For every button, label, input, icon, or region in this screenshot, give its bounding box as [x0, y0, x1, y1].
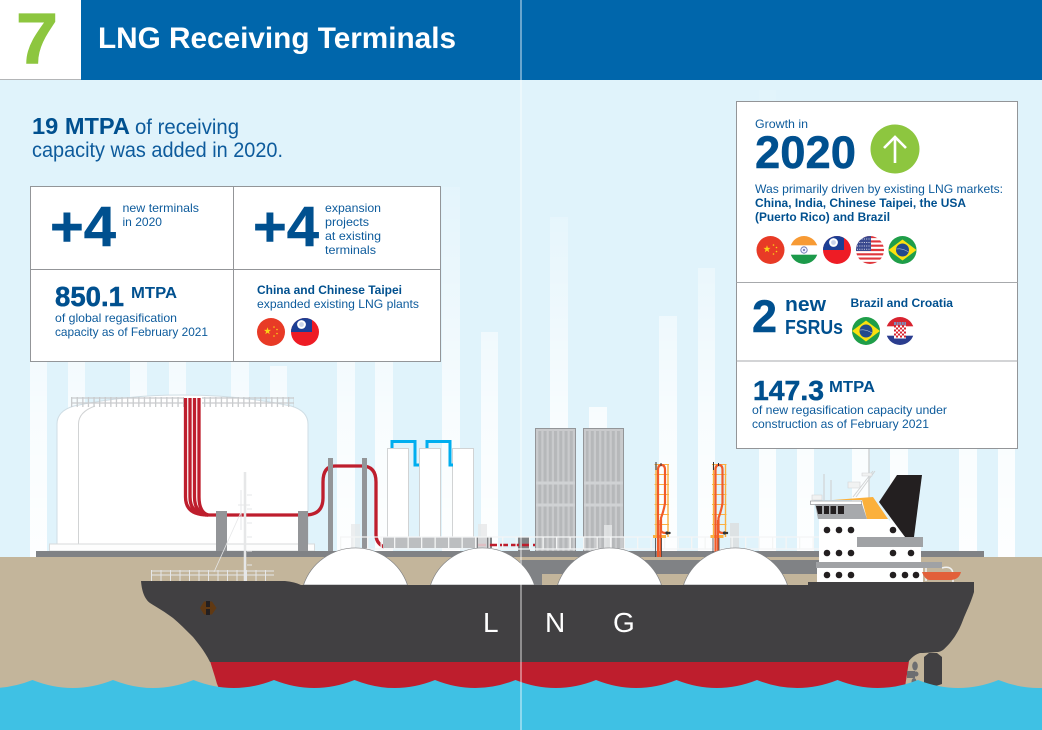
anchor [200, 601, 216, 615]
stat: capacity under construction: 147.3 [753, 375, 824, 406]
wheelhouse [810, 497, 888, 519]
jetty deck [36, 551, 984, 557]
stat: expansion projects: at existing [325, 229, 381, 243]
stat: new terminals: new terminals [122, 201, 199, 215]
hull lettering [483, 607, 635, 638]
stat: global regasification capacity: MTPA [131, 285, 177, 302]
section number: 7 [16, 0, 58, 79]
stat: capacity under construction: MTPA [829, 379, 875, 396]
title: LNG Receiving Terminals [98, 22, 456, 55]
flag: India [790, 236, 818, 264]
growth drivers text [755, 182, 1003, 224]
headline statement: of receiving [135, 116, 239, 139]
stat: expansion projects: projects [325, 215, 369, 229]
accommodation decks [816, 519, 942, 582]
growth drivers text: (Puerto Rico) and Brazil [755, 210, 890, 224]
headline statement: capacity was added in 2020. [32, 139, 283, 162]
flag: USA [856, 236, 884, 264]
LNG tanker [141, 445, 974, 700]
stat: new FSRUs [752, 291, 953, 342]
funnel [879, 475, 922, 537]
lifeboat [922, 567, 961, 582]
loading arm 2 [710, 462, 728, 557]
ground [0, 557, 1042, 730]
stat: expansion projects: expansion [325, 201, 381, 215]
stat: capacity under construction: of new regasification capacity under [752, 403, 947, 417]
panel: right statistics [736, 102, 1018, 448]
stat: expansion projects: +4 [253, 195, 319, 259]
stat: global regasification capacity: 850.1 [55, 281, 124, 312]
flag: Brazil [888, 236, 916, 264]
water [0, 680, 1042, 730]
stat: China and Chinese Taipei: China and Chinese Taipei [257, 283, 402, 297]
growth drivers text: China, India, Chinese Taipei, the USA [755, 196, 966, 210]
vaporiser towers [536, 428, 624, 552]
hull lettering: L [483, 607, 499, 638]
stat: new terminals: in 2020 [122, 215, 162, 229]
stat: global regasification capacity: of global regasification [55, 311, 177, 325]
stat: new FSRUs: 2 [752, 291, 777, 342]
stat: expansion projects [253, 195, 381, 259]
stat: new FSRUs: FSRUs [785, 317, 843, 339]
pipe rack and deck railing [340, 523, 860, 551]
growth heading: Growth in [755, 117, 808, 131]
hull lettering: N [545, 607, 565, 638]
red underbody [210, 661, 909, 700]
bow mast [214, 472, 252, 581]
growth drivers text: Was primarily driven by existing LNG markets: [755, 182, 1003, 196]
flag: China [257, 318, 285, 346]
flag: Chinese Taipei [291, 318, 319, 346]
stat: new terminals [50, 195, 199, 259]
cargo domes [304, 548, 788, 585]
bow railing [151, 571, 274, 576]
storage terminal scene [36, 395, 984, 557]
stat: global regasification capacity [55, 281, 208, 339]
panel: left statistics [30, 186, 441, 362]
white process vessels [388, 448, 474, 538]
stat: China and Chinese Taipei [257, 283, 419, 311]
headline statement: 19 MTPA [32, 113, 130, 139]
stat: new terminals: +4 [50, 195, 116, 259]
hull [141, 581, 974, 662]
stat: China and Chinese Taipei: expanded existing LNG plants [257, 297, 419, 311]
propeller [907, 662, 918, 686]
header band [0, 0, 1042, 80]
flag: Croatia [886, 317, 914, 345]
radar mast and antennas [812, 445, 875, 500]
loading arm 1 [653, 462, 671, 557]
pipe supports [216, 458, 367, 551]
headline statement [32, 113, 283, 162]
hull lettering: G [613, 607, 635, 638]
background skyline bars [30, 90, 1015, 560]
red pipes from tank [186, 398, 384, 547]
stat: capacity under construction: construction as of February 2021 [752, 417, 929, 431]
flag: China [756, 236, 784, 264]
stat: new FSRUs: new [785, 294, 826, 316]
flag: Chinese Taipei [823, 236, 851, 264]
flag: Brazil [852, 317, 880, 345]
blue connecting pipes [392, 442, 453, 465]
icon: up arrow [870, 124, 920, 174]
LNG storage tank [50, 395, 314, 551]
stat: global regasification capacity: capacity as of February 2021 [55, 325, 208, 339]
jetty pier [520, 560, 820, 585]
stat: expansion projects: terminals [325, 243, 376, 257]
centre fold line [520, 0, 522, 730]
stat: capacity under construction [752, 375, 947, 431]
growth heading: 2020 [755, 127, 856, 178]
stat: new FSRUs: Brazil and Croatia [850, 296, 953, 310]
rudder [924, 653, 942, 686]
